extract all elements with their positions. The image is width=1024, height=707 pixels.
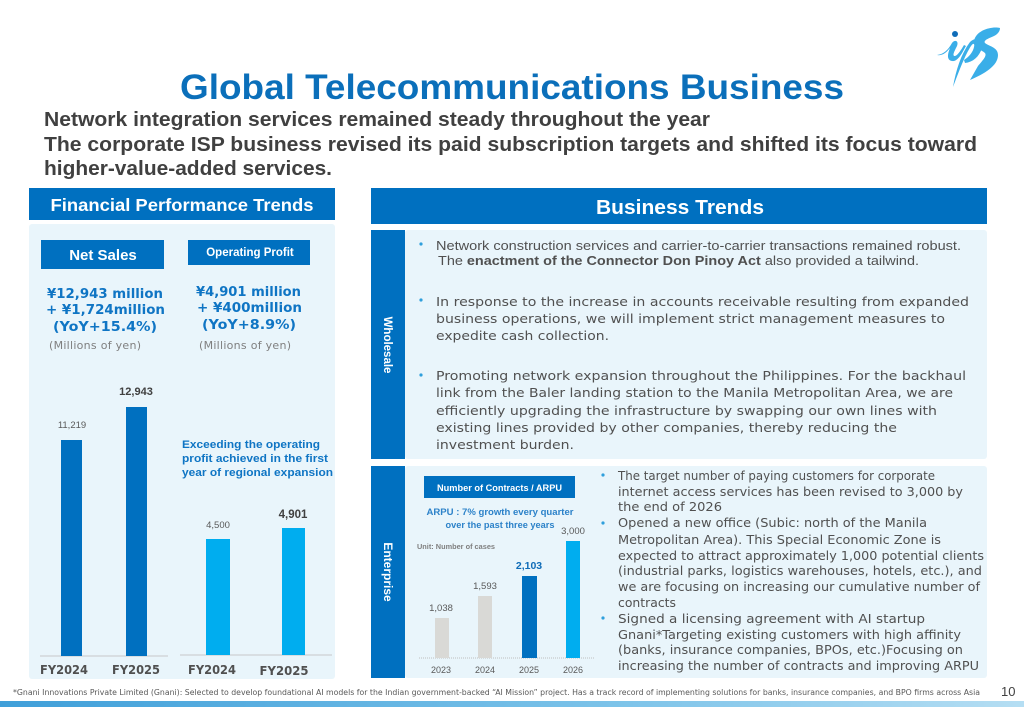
- bullet: new office: (industrial parks, logistics warehouses, hotels, etc.), and: [618, 563, 982, 578]
- bullet: new office: Metropolitan Area). This Special Economic Zone is: [618, 532, 941, 547]
- enterprise side label: Enterprise: [381, 542, 395, 602]
- bar FY2025: 4,901: [279, 509, 308, 521]
- subtitle text: Network integration services remained steady throughout the year: [44, 109, 710, 131]
- bar 2025: 2,103: [516, 560, 542, 572]
- unit label: Unit: Number of cases: [417, 544, 495, 551]
- bullet: target customers: the end of 2026: [618, 499, 722, 514]
- logo: IPS: [937, 28, 1000, 87]
- bullet: licensing agreement: increasing the number of contracts and improving ARPU: [618, 658, 979, 673]
- operating profit figures: + ¥400million: [197, 300, 302, 316]
- bar FY2024: [40, 420, 88, 677]
- bullet: network expansion: Promoting network expansion throughout the Philippines. For the backhaul: [436, 368, 966, 383]
- bar 2023: 2023: [431, 665, 451, 675]
- bottom bar: [0, 701, 1024, 707]
- bar chart: contracts: [419, 526, 595, 675]
- bullet: receivables: business operations, we will implement strict management measures to: [436, 311, 945, 326]
- bullet: licensing agreement: (banks, insurance companies, BPOs, etc.)Focusing on: [618, 642, 963, 657]
- net sales label: Net Sales: [69, 247, 137, 264]
- bullet: new office: we are focusing on increasing our cumulative number of: [618, 579, 981, 594]
- ARPU note: ARPU : 7% growth every quarter: [426, 507, 574, 517]
- bar FY2025: FY2025: [260, 664, 308, 678]
- net sales figures: + ¥1,724million: [46, 302, 165, 318]
- net sales figures: [46, 286, 165, 352]
- panel background: [29, 224, 335, 679]
- panel: wholesale: [371, 230, 987, 459]
- page number: 10: [1001, 684, 1015, 699]
- contracts chart heading: [424, 476, 575, 498]
- bullet: network expansion: efficiently upgrading the infrastructure by swapping our own lines with: [436, 403, 937, 418]
- enterprise side label: [371, 466, 405, 678]
- bullet: receivables: expedite cash collection.: [436, 328, 609, 343]
- footnote: *Gnani Innovations Private Limited (Gnani): Selected to develop foundational AI models for the Indian government-backed “AI Mission” project. Has a track record of implementing solutions for banks, insurance companies, and BPO firms across Asia: [13, 688, 980, 697]
- bullet: receivables: [419, 294, 969, 343]
- callout: exceeding operating profit: Exceeding the operating: [182, 439, 320, 451]
- callout: exceeding operating profit: [182, 439, 333, 479]
- panel: financial performance trends: [29, 188, 335, 679]
- bullet: network construction: The enactment of the Connector Don Pinoy Act also provided a tailwind.: [438, 253, 919, 268]
- bar FY2024: FY2024: [40, 663, 88, 677]
- heading: business trends: [371, 188, 987, 224]
- net sales figures: (YoY+15.4%): [53, 319, 157, 335]
- bar 2025: [516, 560, 542, 675]
- net sales figures: (Millions of yen): [49, 339, 141, 352]
- bar 2025: 2025: [519, 665, 539, 675]
- bar FY2024: [188, 520, 236, 677]
- operating profit figures: ¥4,901 million: [196, 284, 301, 300]
- wholesale side label: [371, 230, 405, 459]
- net sales label: [41, 240, 164, 269]
- bullet: new office: [601, 515, 984, 610]
- callout: exceeding operating profit: profit achieved in the first: [182, 453, 328, 465]
- subtitle text: [44, 109, 977, 180]
- bullet: target customers: [601, 468, 964, 514]
- bar 2024: 2024: [475, 665, 495, 675]
- bar 2024: 1,593: [473, 581, 497, 592]
- title: Global Telecommunications Business: [180, 68, 844, 107]
- heading: business trends: Business Trends: [596, 197, 764, 219]
- operating profit figures: (Millions of yen): [199, 339, 291, 352]
- wholesale side label: Wholesale: [381, 317, 393, 373]
- bullet: licensing agreement: Gnani*Targeting existing customers with high affinity: [618, 627, 962, 642]
- bar 2026: 3,000: [561, 526, 585, 537]
- net sales figures: ¥12,943 million: [47, 286, 163, 302]
- contracts chart heading: Number of Contracts / ARPU: [437, 483, 562, 493]
- bar FY2025: [260, 509, 308, 678]
- bullet: network expansion: investment burden.: [436, 437, 574, 452]
- panel: enterprise: [371, 466, 987, 678]
- bar FY2024: FY2024: [188, 663, 236, 677]
- bar FY2024: 4,500: [206, 520, 230, 531]
- bullet: network construction: [419, 238, 961, 268]
- heading: financial performance trends: Financial Performance Trends: [50, 195, 314, 215]
- bullet: network construction: Network construction services and carrier-to-carrier transactions remained robust.: [436, 238, 961, 253]
- operating profit label: Operating Profit: [206, 247, 294, 259]
- callout: exceeding operating profit: year of regional expansion: [182, 467, 333, 479]
- bar 2026: 2026: [563, 665, 583, 675]
- bullet: network expansion: existing lines provided by other companies, thereby reducing the: [436, 420, 897, 435]
- bullet: target customers: internet access services has been revised to 3,000 by: [618, 484, 964, 499]
- bullet: new office: contracts: [618, 595, 676, 610]
- bullet: receivables: In response to the increase in accounts receivable resulting from expanded: [436, 294, 969, 309]
- bar FY2025: [112, 386, 160, 677]
- bullet: new office: expected to attract approximately 1,000 potential clients: [618, 548, 984, 563]
- bar 2026: [561, 526, 585, 675]
- bullet: licensing agreement: [601, 611, 979, 673]
- bullet: licensing agreement: Signed a licensing agreement with AI startup: [618, 611, 925, 626]
- bar chart: operating profit: [180, 509, 332, 678]
- heading: financial performance trends: [29, 188, 335, 220]
- bar 2023: [429, 603, 453, 675]
- bar 2024: [473, 581, 497, 675]
- subtitle text: higher-value-added services.: [44, 158, 332, 180]
- bar FY2024: 11,219: [58, 420, 86, 431]
- ARPU note: [426, 507, 574, 530]
- operating profit label: [188, 240, 310, 265]
- bullet: target customers: The target number of paying customers for corporate: [617, 468, 935, 483]
- operating profit figures: [196, 284, 302, 352]
- bar FY2025: FY2025: [112, 663, 160, 677]
- bar 2023: 1,038: [429, 603, 453, 614]
- bar chart: net sales: [40, 386, 168, 677]
- ARPU note: over the past three years: [446, 520, 554, 530]
- bullet: network expansion: [419, 368, 966, 452]
- bullet: new office: Opened a new office (Subic: north of the Manila: [618, 515, 927, 530]
- operating profit figures: (YoY+8.9%): [202, 317, 296, 333]
- bar FY2025: 12,943: [119, 386, 153, 398]
- subtitle text: The corporate ISP business revised its paid subscription targets and shifted its focus toward: [44, 134, 977, 156]
- bullet: network expansion: link from the Baler landing station to the Manila Metropolitan Area, we are: [436, 385, 953, 400]
